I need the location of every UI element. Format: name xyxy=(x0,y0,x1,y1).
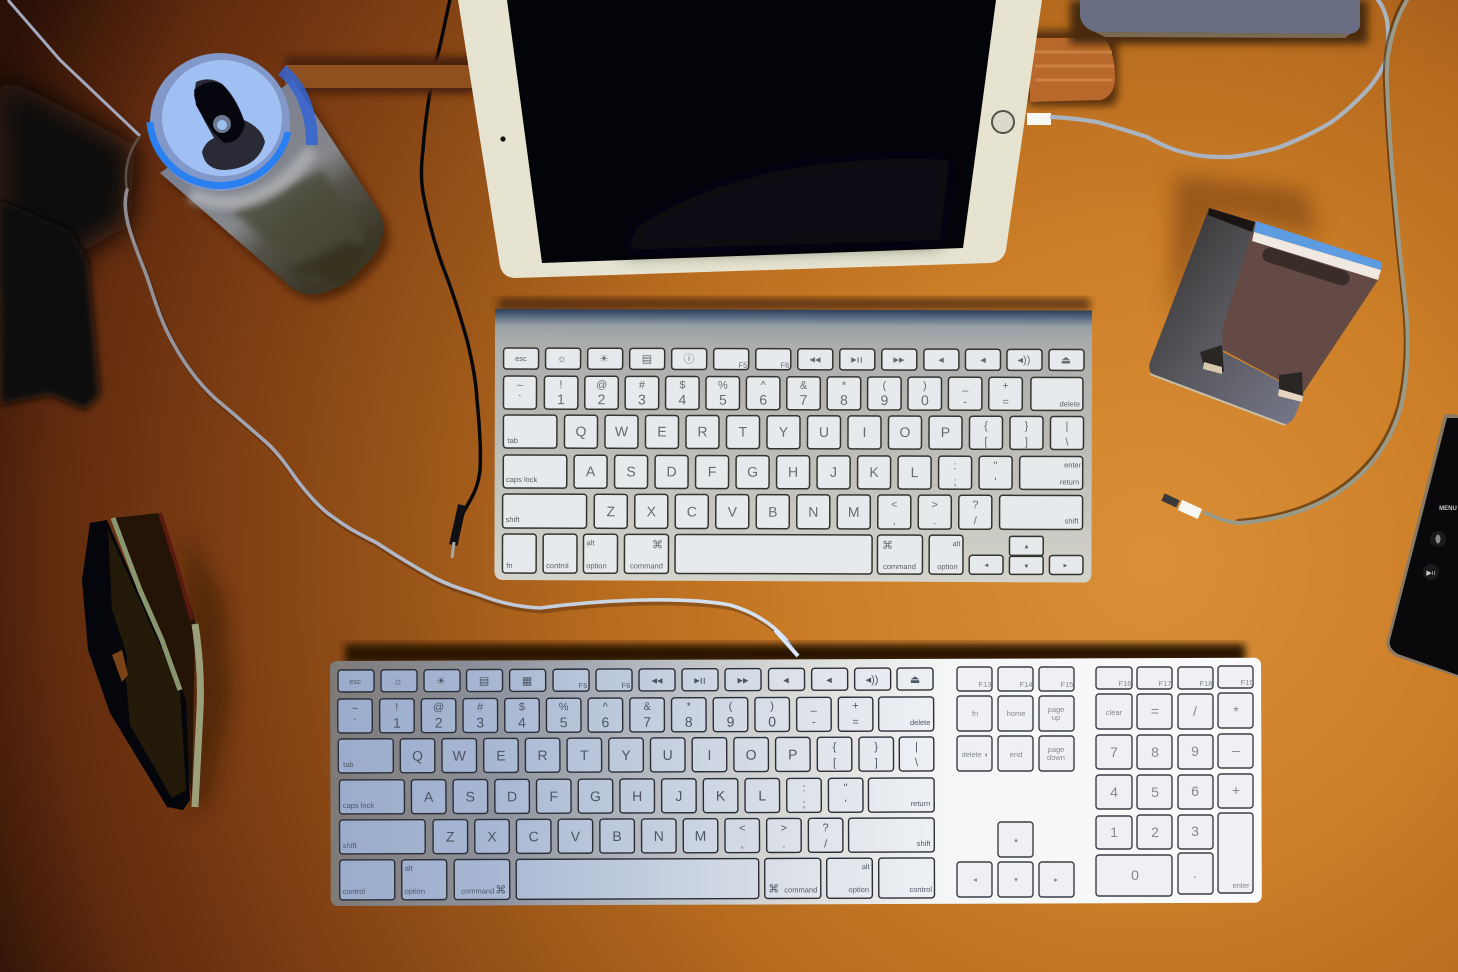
home row: H xyxy=(632,788,642,804)
lower letter row: < xyxy=(739,823,745,835)
remote control xyxy=(1386,414,1458,677)
qwerty row xyxy=(338,737,934,773)
function row: ⓘ xyxy=(683,352,694,366)
white power cable top left xyxy=(8,0,140,136)
lower letter row: shift xyxy=(1065,516,1079,526)
function row: ▦ xyxy=(522,675,532,687)
function row: ▸ıı xyxy=(851,354,863,366)
function row: F6 xyxy=(622,681,630,690)
lower letter row: / xyxy=(824,838,828,850)
number row: # xyxy=(639,379,646,391)
home row: G xyxy=(590,788,601,804)
number row: 8 xyxy=(840,392,848,408)
modifier row: option xyxy=(586,561,607,570)
function row: ⏏ xyxy=(910,674,920,686)
numeric keypad: F19 xyxy=(1241,678,1253,687)
home row: ' xyxy=(994,476,997,488)
numeric keypad: / xyxy=(1193,703,1197,719)
lower letter row: B xyxy=(768,504,777,520)
home row: A xyxy=(424,789,434,805)
numeric keypad: + xyxy=(1232,782,1240,798)
white cable end meeting keyboard xyxy=(775,630,798,656)
numeric keypad: – xyxy=(1232,742,1240,758)
home row: D xyxy=(666,463,677,479)
function row: F6 xyxy=(781,361,789,370)
lower letter row: B xyxy=(612,828,622,844)
function row: esc xyxy=(515,354,527,363)
home row xyxy=(339,778,934,814)
lower letter row: > xyxy=(781,822,787,834)
navigation cluster: page xyxy=(1048,745,1064,754)
mic button xyxy=(1430,531,1446,547)
feet xyxy=(1200,345,1224,372)
number row: 2 xyxy=(435,715,443,731)
number row: 5 xyxy=(719,392,727,408)
function row: ▤ xyxy=(642,353,652,365)
modifier row xyxy=(340,858,934,900)
modifier row: control xyxy=(909,885,932,894)
number row: 6 xyxy=(759,392,767,408)
number row: ~ xyxy=(352,703,358,715)
modifier row xyxy=(502,534,1083,575)
number row: ) xyxy=(770,700,774,712)
qwerty row: W xyxy=(453,748,467,764)
lower letter row: ? xyxy=(972,499,978,511)
number row: 1 xyxy=(393,715,401,731)
tablet xyxy=(458,0,1042,278)
number row: + xyxy=(852,700,859,712)
numeric keypad: 1 xyxy=(1110,824,1118,840)
home row: ; xyxy=(954,476,957,488)
function row: ◂)) xyxy=(1018,354,1030,366)
modifier row: control xyxy=(342,887,365,896)
qwerty row: tab xyxy=(508,436,518,445)
home row: caps lock xyxy=(343,801,374,810)
modifier row: alt xyxy=(862,862,871,871)
home row: J xyxy=(675,788,682,804)
number row: - xyxy=(812,716,816,728)
number row: ) xyxy=(923,380,927,392)
qwerty row: | xyxy=(1066,420,1068,432)
keyboard body xyxy=(330,658,1262,906)
home row: F xyxy=(708,464,716,480)
modifier row: ▾ xyxy=(1025,561,1029,570)
lower letter row: > xyxy=(932,499,938,511)
shadow behind top keyboard xyxy=(498,298,1090,310)
number row: ( xyxy=(729,701,733,713)
function row: ▸ıı xyxy=(694,675,706,687)
number row: 2 xyxy=(598,391,606,407)
navigation cluster: ▴ xyxy=(1014,835,1018,844)
home row: " xyxy=(994,460,998,472)
function row: ▸▸ xyxy=(893,354,905,366)
number row: * xyxy=(687,701,692,713)
number row: 9 xyxy=(727,714,735,730)
navigation cluster: ◂ xyxy=(973,875,977,884)
numeric keypad: 8 xyxy=(1151,744,1159,760)
modifier row: ⌘ xyxy=(882,540,893,552)
modifier row: command xyxy=(630,561,663,570)
function row xyxy=(504,348,1084,371)
number row: 4 xyxy=(518,714,526,730)
navigation cluster: ▸ xyxy=(1054,875,1058,884)
metal tablet stand xyxy=(1149,208,1382,425)
navigation cluster: F13 xyxy=(979,680,991,689)
numeric keypad: 0 xyxy=(1131,867,1139,883)
function row: F5 xyxy=(739,361,747,370)
function row: ☼ xyxy=(557,353,567,365)
qwerty row: R xyxy=(538,747,548,763)
white power cable xyxy=(125,190,800,659)
number row: ! xyxy=(395,702,398,714)
lower letter row: . xyxy=(933,515,936,527)
number row: & xyxy=(800,380,808,392)
black cable with connector xyxy=(422,0,480,558)
tablet screen xyxy=(507,0,996,263)
lower letter row: shift xyxy=(343,841,357,850)
function row: ☼ xyxy=(393,676,403,688)
lower letter row: Z xyxy=(446,829,455,845)
modifier row: ⌘ xyxy=(495,884,506,896)
function row: esc xyxy=(349,677,361,686)
stand shadow xyxy=(1170,175,1320,320)
numeric keypad: enter xyxy=(1232,881,1250,890)
dark object at left edge xyxy=(0,75,135,410)
number row: % xyxy=(559,701,569,713)
modifier row: control xyxy=(546,561,569,570)
home row xyxy=(503,455,1083,490)
lower letter row: Z xyxy=(606,503,616,519)
qwerty row: Y xyxy=(779,424,789,440)
number row: ^ xyxy=(761,380,767,392)
numeric keypad: * xyxy=(1233,703,1239,719)
navigation cluster: home xyxy=(1007,709,1025,718)
faint cable section in shadow xyxy=(126,136,140,190)
home row: K xyxy=(869,464,879,480)
numeric keypad: 2 xyxy=(1151,824,1159,840)
modifier row: ⌘ xyxy=(768,883,779,895)
lower letter row: . xyxy=(782,838,785,850)
navigation cluster: end xyxy=(1010,750,1022,759)
numeric keypad: 9 xyxy=(1191,743,1199,759)
number row: 1 xyxy=(557,391,565,407)
lower letter row: N xyxy=(808,504,818,520)
home row: A xyxy=(586,463,596,479)
home row: S xyxy=(626,463,636,479)
lower letter row: X xyxy=(647,503,657,519)
qwerty row: T xyxy=(580,747,589,763)
number row xyxy=(503,376,1083,411)
modifier row: option xyxy=(405,887,425,896)
number row: 7 xyxy=(800,392,808,408)
number row: 3 xyxy=(476,714,484,731)
qwerty row: ] xyxy=(1025,436,1028,448)
function row: ◂ xyxy=(938,354,944,366)
main key block xyxy=(338,668,934,900)
qwerty row: | xyxy=(915,741,918,753)
modifier row: alt xyxy=(405,864,414,873)
function row: F5 xyxy=(579,681,587,690)
navigation cluster: down xyxy=(1047,753,1065,762)
qwerty row: T xyxy=(739,424,748,440)
numeric keypad: 5 xyxy=(1151,784,1159,800)
qwerty row: W xyxy=(615,423,629,439)
top wireless keyboard xyxy=(494,309,1092,583)
keyboard body xyxy=(494,309,1092,583)
home row: ; xyxy=(802,798,806,810)
qwerty row: I xyxy=(707,747,711,763)
function row: ◂◂ xyxy=(809,354,821,366)
camera xyxy=(500,136,506,142)
modifier row: ▸ xyxy=(1064,560,1068,569)
lower letter row: , xyxy=(893,515,896,527)
home row: K xyxy=(716,788,726,804)
lower letter row: M xyxy=(695,828,706,844)
function row: ▤ xyxy=(479,675,489,688)
number row xyxy=(338,697,934,733)
stand base plate xyxy=(1149,208,1304,424)
function row: ▸▸ xyxy=(737,675,749,687)
number row: = xyxy=(1002,396,1009,408)
qwerty row: I xyxy=(863,424,866,440)
function row: ☀ xyxy=(599,353,609,365)
lower letter row: C xyxy=(529,828,539,844)
qwerty row xyxy=(503,415,1084,450)
qwerty row: U xyxy=(819,424,829,440)
home button xyxy=(992,111,1014,133)
lower letter row: N xyxy=(654,828,664,844)
number row: ` xyxy=(353,718,357,730)
modifier row: option xyxy=(937,562,958,571)
modifier row: ◂ xyxy=(985,560,989,569)
wooden bar behind tablet xyxy=(285,56,475,94)
lower letter row: V xyxy=(571,828,581,844)
numeric keypad: . xyxy=(1193,865,1197,881)
qwerty row: P xyxy=(788,746,797,762)
modifier row: alt xyxy=(953,539,961,548)
qwerty row: [ xyxy=(984,436,988,448)
home row: enter xyxy=(1064,460,1082,470)
number row: & xyxy=(643,701,651,713)
qwerty row: O xyxy=(746,747,757,763)
qwerty row: } xyxy=(874,741,878,753)
function row: ◂ xyxy=(826,674,832,686)
red temple xyxy=(160,513,192,620)
home row: : xyxy=(954,460,957,472)
modifier row: ▴ xyxy=(1025,541,1029,550)
numeric keypad: F18 xyxy=(1200,679,1212,688)
modifier row: command xyxy=(461,886,494,896)
navigation cluster: page xyxy=(1048,705,1064,714)
qwerty row: Q xyxy=(412,748,423,764)
home row: " xyxy=(844,782,848,794)
number row: 6 xyxy=(601,714,610,730)
lower letter row: V xyxy=(728,504,738,520)
stand upper plate xyxy=(1222,222,1382,393)
lower letter row: X xyxy=(487,828,497,844)
silver box top right xyxy=(1070,0,1368,44)
number row: 0 xyxy=(768,713,776,729)
lower letter row: shift xyxy=(506,515,520,524)
number row: = xyxy=(852,716,859,728)
number row: - xyxy=(963,396,967,408)
lower letter row: ? xyxy=(822,822,829,834)
qwerty row: tab xyxy=(343,760,354,769)
function row: ◂ xyxy=(783,674,789,686)
number row: ` xyxy=(518,394,522,406)
qwerty row: O xyxy=(900,424,911,440)
home row: J xyxy=(830,464,837,480)
qwerty row: ] xyxy=(875,757,878,769)
numeric keypad: F16 xyxy=(1119,679,1131,688)
numeric keypad: 3 xyxy=(1191,823,1199,839)
qwerty row: { xyxy=(833,741,837,753)
number row: delete xyxy=(1060,399,1080,409)
dark area between frame and temple xyxy=(113,513,195,800)
number row: 5 xyxy=(560,714,568,730)
home row: ' xyxy=(845,798,847,810)
modifier row: option xyxy=(849,885,869,894)
home row: G xyxy=(747,464,758,480)
numeric keypad: 7 xyxy=(1110,744,1118,760)
long white cable right xyxy=(1163,0,1408,523)
bottom wired keyboard xyxy=(330,658,1262,906)
lightning connector xyxy=(1180,505,1200,514)
function row: ⏏ xyxy=(1061,354,1071,366)
play button: ▶ıı xyxy=(1426,570,1436,577)
lightning cable into tablet xyxy=(1027,0,1388,157)
number row: ( xyxy=(883,380,887,392)
number row: $ xyxy=(519,701,525,713)
home row: H xyxy=(788,464,798,480)
modifier row: command xyxy=(784,885,817,894)
home row: D xyxy=(507,788,517,804)
qwerty row: R xyxy=(697,424,708,440)
number row: 8 xyxy=(685,714,693,730)
home row: return xyxy=(1060,477,1079,487)
numeric keypad: 4 xyxy=(1110,784,1118,800)
qwerty row: E xyxy=(496,747,506,763)
green frame strip xyxy=(113,518,180,690)
lens xyxy=(108,530,186,798)
qwerty row: E xyxy=(657,423,667,439)
lower letter row: M xyxy=(848,504,860,520)
number row: * xyxy=(842,380,847,392)
modifier row: command xyxy=(883,562,916,571)
numeric keypad xyxy=(1096,666,1253,896)
home row: return xyxy=(911,799,930,808)
number row: ~ xyxy=(517,380,523,392)
navigation cluster: F14 xyxy=(1020,680,1032,689)
number row: delete xyxy=(910,718,930,727)
lens notch xyxy=(112,650,128,682)
qwerty row: \ xyxy=(915,757,919,769)
qwerty row: { xyxy=(984,420,988,432)
navigation cluster: fn xyxy=(972,709,978,718)
lower letter row xyxy=(503,494,1083,530)
qwerty row: Y xyxy=(621,747,631,763)
number row: 4 xyxy=(678,391,686,407)
function row xyxy=(338,668,933,692)
qwerty row: P xyxy=(941,424,950,440)
numeric keypad: 6 xyxy=(1191,783,1199,799)
function row: ☀ xyxy=(436,676,446,688)
number row: @ xyxy=(433,702,444,714)
number row: + xyxy=(1002,380,1009,392)
navigation cluster: F15 xyxy=(1061,680,1073,689)
home row: S xyxy=(466,789,475,805)
lower letter row: < xyxy=(891,499,898,511)
modifier row: alt xyxy=(587,538,595,547)
number row: 3 xyxy=(638,391,646,407)
numeric keypad: = xyxy=(1151,703,1159,719)
number row: @ xyxy=(596,379,607,391)
soda can xyxy=(150,53,389,301)
modifier row: fn xyxy=(506,561,513,570)
modifier row: ⌘ xyxy=(652,539,663,551)
number row: _ xyxy=(961,380,969,392)
menu label: MENU xyxy=(1439,506,1457,512)
function row: ◂)) xyxy=(866,674,878,686)
qwerty row: \ xyxy=(1065,436,1069,448)
number row: # xyxy=(477,701,484,714)
lower letter row: / xyxy=(974,515,978,527)
lower letter row: , xyxy=(741,839,744,851)
home row: L xyxy=(911,464,919,480)
function row: ◂◂ xyxy=(651,675,663,687)
qwerty row: Q xyxy=(576,423,587,439)
home row: caps lock xyxy=(506,475,538,484)
play button xyxy=(1423,564,1439,580)
number row: $ xyxy=(679,379,685,391)
tablet body xyxy=(458,0,1042,278)
navigation cluster: up xyxy=(1052,713,1060,722)
qwerty row: [ xyxy=(833,757,836,769)
home row: L xyxy=(758,788,766,804)
navigation cluster xyxy=(957,667,1074,897)
slot xyxy=(1270,255,1342,278)
numeric keypad: F17 xyxy=(1159,679,1171,688)
qwerty row: U xyxy=(663,747,673,763)
navigation cluster: delete ◗ xyxy=(961,750,989,759)
navigation cluster: ▾ xyxy=(1014,875,1018,884)
number row: 0 xyxy=(921,392,929,408)
number row: ^ xyxy=(603,701,609,713)
number row: ! xyxy=(559,379,562,391)
home row: F xyxy=(549,788,558,804)
numeric keypad: clear xyxy=(1106,708,1123,717)
number row: 9 xyxy=(880,392,888,408)
sunglasses xyxy=(82,513,232,815)
number row: 7 xyxy=(643,714,651,730)
shadow behind bottom keyboard xyxy=(345,644,1245,664)
lower letter row: shift xyxy=(917,839,931,848)
function row: ◂ xyxy=(980,354,986,366)
qwerty row: } xyxy=(1025,420,1029,432)
home row: : xyxy=(802,782,805,794)
pale temple xyxy=(195,624,200,807)
blue and white edge xyxy=(1254,221,1382,270)
wooden handle right of tablet xyxy=(1026,30,1118,106)
number row: % xyxy=(718,380,728,392)
lower letter row: C xyxy=(687,503,697,520)
lower letter row xyxy=(340,818,934,854)
number row: _ xyxy=(810,700,818,712)
